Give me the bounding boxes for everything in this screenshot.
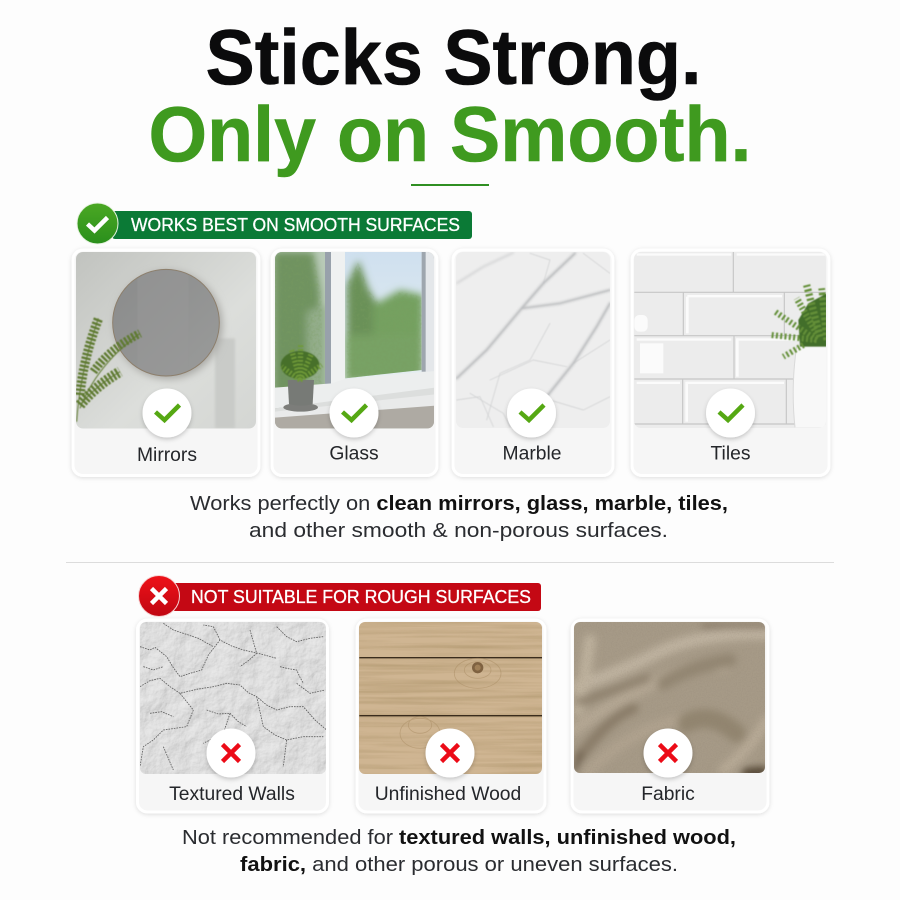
label: Mirrors <box>137 445 197 466</box>
image: subway tiles with plant <box>634 252 827 428</box>
title <box>148 13 752 178</box>
label: Glass <box>329 444 379 464</box>
panel: tiles <box>632 250 829 476</box>
image: white marble <box>456 252 610 428</box>
icon: green check circle <box>77 203 118 244</box>
banner text: NOT SUITABLE FOR ROUGH SURFACES <box>191 587 531 607</box>
banner text: WORKS BEST ON SMOOTH SURFACES <box>131 215 460 235</box>
image: round mirror with plant <box>76 252 256 429</box>
label: Tiles <box>710 444 750 464</box>
text block: works perfectly: Works perfectly on clean mirrors, glass, marble, tiles, <box>190 492 728 515</box>
title underline <box>411 184 489 186</box>
banner: not suitable for rough surfaces <box>138 576 541 616</box>
image: linen fabric folds <box>573 622 767 773</box>
badge: x <box>206 728 256 778</box>
label: Unfinished Wood <box>375 784 521 805</box>
panel: textured walls <box>138 620 328 812</box>
text block: not recommended <box>182 826 736 876</box>
image: window with potted plant <box>273 252 435 428</box>
panel: fabric <box>572 620 768 812</box>
text block: works perfectly <box>190 492 728 542</box>
text block: works perfectly: and other smooth & non-porous surfaces. <box>249 519 668 542</box>
badge: check <box>330 388 378 438</box>
panel: mirrors <box>73 250 259 476</box>
badge: x <box>426 728 474 778</box>
text block: not recommended: Not recommended for textured walls, unfinished wood, <box>182 826 736 849</box>
panel: unfinished wood <box>357 620 545 812</box>
label: Textured Walls <box>169 784 295 805</box>
text block: not recommended: fabric, and other porous or uneven surfaces. <box>240 853 678 876</box>
banner: works best on smooth surfaces <box>77 203 472 244</box>
panel: marble <box>453 250 613 476</box>
label: Fabric <box>641 784 695 805</box>
badge: check <box>507 388 556 438</box>
badge: check <box>706 388 755 438</box>
title line: Sticks Strong.: Sticks Strong. <box>206 13 702 101</box>
image: textured plaster <box>140 622 327 774</box>
title line: Only on Smooth.: Only on Smooth. <box>148 90 752 178</box>
label: Marble <box>503 444 561 464</box>
icon: red x circle <box>138 576 180 616</box>
image: wood planks <box>359 622 542 774</box>
badge: check <box>142 388 192 438</box>
badge: x <box>644 728 692 778</box>
panel: glass <box>272 250 437 476</box>
